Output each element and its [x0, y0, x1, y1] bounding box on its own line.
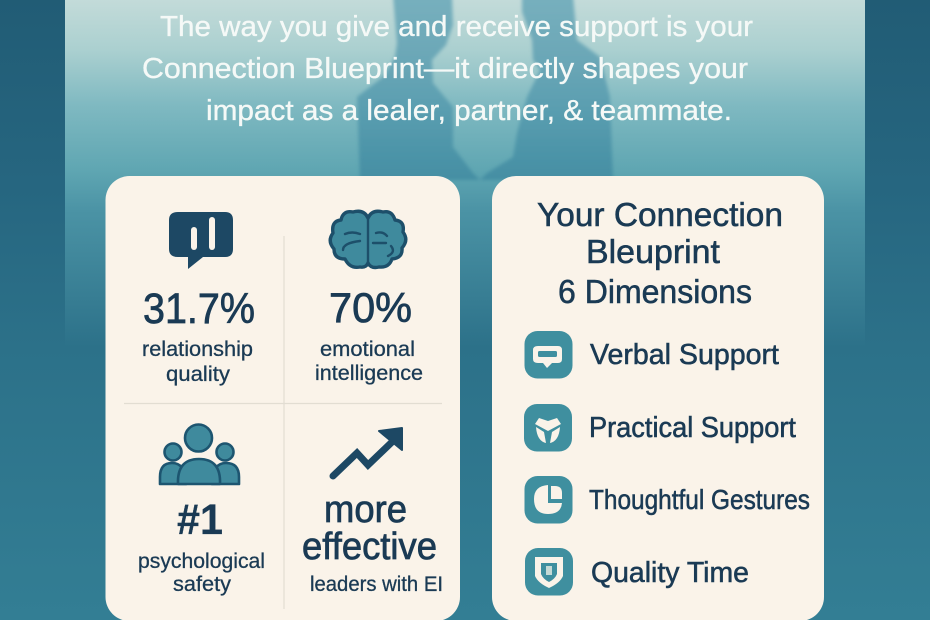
row: practical support — [524, 404, 796, 452]
panel: statistics card — [106, 176, 460, 620]
row: verbal support: Verbal Support — [590, 339, 779, 371]
heading: Your Connection — [537, 196, 783, 233]
stat: relationship quality: 31.7% — [143, 285, 255, 333]
stat: psychological safety: #1 — [177, 496, 223, 544]
stat: more effective leaders: effective — [302, 526, 437, 568]
row: practical support: Practical Support — [589, 412, 796, 444]
stat: psychological safety — [138, 496, 265, 596]
panel: connection blueprint dimensions — [492, 176, 824, 620]
icon: brain — [330, 211, 406, 268]
stat: more effective leaders: leaders with EI — [310, 573, 443, 596]
stat: psychological safety: safety — [173, 572, 231, 596]
intro text — [142, 11, 753, 127]
stat: relationship quality — [142, 285, 255, 386]
stat: emotional intelligence: 70% — [329, 284, 412, 331]
icon: pie chart — [524, 476, 572, 524]
icon: leaf heart — [524, 404, 572, 452]
stat: more effective leaders — [302, 489, 443, 596]
stat: emotional intelligence: emotional — [320, 337, 415, 361]
icon: shield — [525, 548, 573, 596]
row: quality time: Quality Time — [591, 557, 749, 589]
row: quality time — [525, 548, 749, 596]
heading: Bleuprint — [586, 233, 720, 270]
intro text: Connection Blueprint—it directly shapes your — [142, 53, 748, 85]
grid dividers — [124, 236, 442, 609]
stat: psychological safety: psychological — [138, 549, 265, 573]
stat: emotional intelligence — [315, 284, 423, 385]
icon: people group — [160, 424, 239, 484]
stat: more effective leaders: more — [324, 489, 407, 531]
intro text: The way you give and receive support is your — [160, 11, 753, 43]
intro text: impact as a lealer, partner, & teammate. — [206, 95, 732, 127]
icon: trending arrow — [333, 428, 402, 476]
heading: 6 Dimensions — [558, 273, 752, 310]
row: verbal support — [524, 331, 779, 378]
icon: speech bubble — [524, 331, 572, 378]
row: thoughtful gestures: Thoughtful Gestures — [589, 484, 810, 515]
silhouettes of two people — [357, 0, 613, 180]
stat: emotional intelligence: intelligence — [315, 361, 423, 385]
stat: relationship quality: relationship — [142, 337, 253, 361]
row: thoughtful gestures — [524, 476, 810, 524]
icon: chat bubble with bars — [169, 212, 233, 269]
stat: relationship quality: quality — [166, 362, 230, 386]
heading — [537, 196, 783, 310]
